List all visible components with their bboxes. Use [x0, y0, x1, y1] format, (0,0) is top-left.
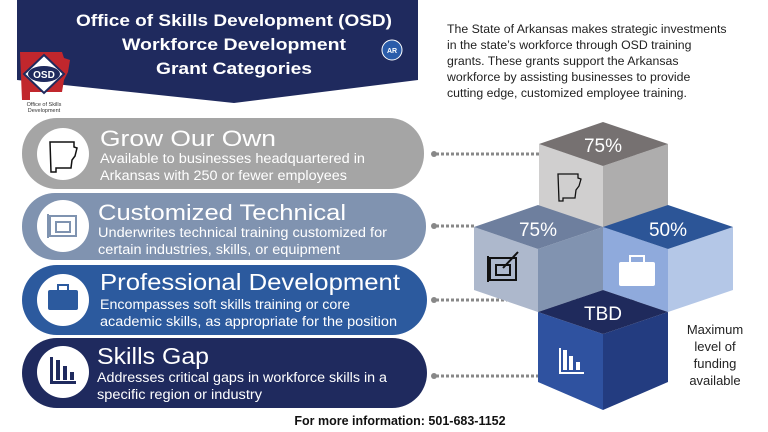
panel: Professional Development: academic skills, as appropriate for the position	[100, 314, 397, 329]
panel: Customized Technical: certain industries, skills, or equipment	[98, 242, 340, 257]
caption: maximum funding: available	[689, 373, 741, 388]
panel: Grow Our Own	[22, 118, 424, 189]
cube: Grow Our Own 75%	[539, 122, 668, 228]
panel: Skills Gap	[22, 338, 427, 408]
intro text	[446, 22, 727, 100]
title: Grant Categories	[156, 59, 312, 78]
icon: Arkansas outline	[50, 142, 77, 172]
cube: Grow Our Own 75%: 75%	[584, 136, 622, 157]
caption: maximum funding	[687, 322, 743, 388]
caption: maximum funding: Maximum	[687, 322, 743, 337]
caption: maximum funding: level of	[694, 339, 736, 354]
logo: OSD: Development	[28, 108, 61, 114]
icon: briefcase	[48, 285, 78, 310]
panel: Customized Technical: Underwrites technical training customized for	[98, 225, 388, 240]
caption: maximum funding: funding	[694, 356, 736, 371]
icon: AR seal: AR	[387, 48, 397, 55]
cube: Professional Development 50%	[603, 205, 733, 312]
title	[76, 11, 392, 78]
icon: AR seal	[382, 40, 402, 60]
header banner	[17, 0, 418, 103]
cube: Customized Technical 75%	[474, 205, 603, 312]
cube: Customized Technical 75%: 75%	[519, 220, 557, 241]
intro text: in the state’s workforce through OSD training	[447, 38, 692, 52]
panel: Skills Gap: Addresses critical gaps in workforce skills in a	[97, 370, 388, 385]
logo: OSD	[20, 52, 70, 114]
panel: Skills Gap: Skills Gap	[97, 343, 209, 369]
intro text: The State of Arkansas makes strategic investments	[447, 22, 727, 36]
title: Office of Skills Development (OSD)	[76, 11, 392, 30]
panel: Professional Development: Professional Development	[100, 269, 401, 295]
panel: Grow Our Own: Grow Our Own	[100, 126, 276, 151]
cube: Skills Gap TBD	[538, 290, 668, 410]
panel: Professional Development	[22, 265, 427, 335]
footer contact: For more information: 501-683-1152	[294, 414, 506, 428]
cube: Skills Gap TBD: TBD	[584, 304, 622, 325]
panel: Professional Development: Encompasses soft skills training or core	[100, 297, 350, 312]
icon: blueprint	[48, 214, 76, 238]
intro text: cutting edge, customized employee training.	[447, 86, 687, 100]
title: Workforce Development	[122, 35, 346, 54]
intro text: grants. These grants support the Arkansas	[447, 54, 678, 68]
icon: declining chart	[50, 357, 76, 384]
logo: OSD: Office of Skills	[27, 102, 62, 108]
intro text: workforce by assisting businesses to provide	[446, 70, 690, 84]
panel: Grow Our Own: Arkansas with 250 or fewer employees	[100, 168, 347, 183]
panel: Customized Technical	[22, 193, 426, 260]
panel: Skills Gap: specific region or industry	[97, 387, 262, 402]
connectors	[431, 151, 651, 379]
panel: Grow Our Own: Available to businesses headquartered in	[100, 151, 365, 166]
cube: Professional Development 50%: 50%	[649, 220, 687, 241]
panel: Customized Technical: Customized Technical	[98, 200, 346, 225]
logo: OSD: OSD	[33, 70, 55, 81]
